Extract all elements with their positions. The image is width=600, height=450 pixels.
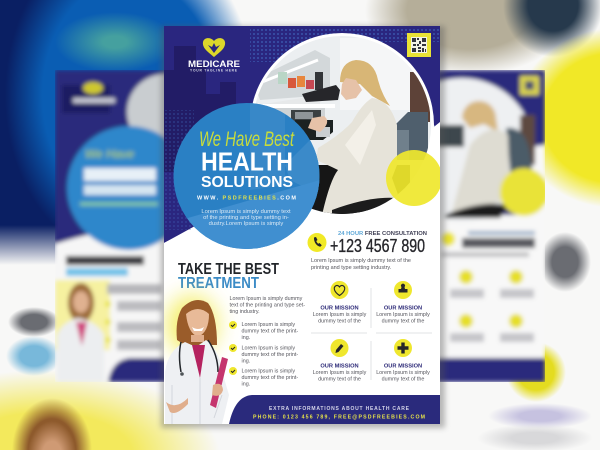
doctor yellow glow	[166, 295, 218, 355]
checklist	[229, 321, 298, 388]
mission 1: Lorem Ipsum is simply	[313, 312, 367, 318]
check item 1: ing.	[242, 335, 250, 341]
mission 1: OUR MISSION	[320, 306, 359, 312]
consultation text	[311, 258, 411, 271]
photo ring	[252, 33, 434, 130]
check item 2: dummy text of the print-	[242, 352, 298, 358]
mission 2: Lorem Ipsum is simply	[376, 312, 430, 318]
right blurred flyer	[440, 70, 545, 382]
lab photo	[256, 36, 431, 214]
treatment intro text: text of the printing and type set-	[230, 302, 305, 308]
tagline: YOUR TAGLINE HERE	[190, 68, 238, 72]
scientist	[308, 60, 400, 218]
phone icon	[308, 233, 326, 252]
treatment intro text: ting industry.	[230, 309, 260, 315]
check item 3: Lorem Ipsum is simply	[242, 368, 295, 374]
mission 4: OUR MISSION	[384, 364, 422, 370]
white lower area curve	[164, 122, 440, 243]
mission 1: dummy text of the	[318, 318, 361, 324]
doctor portrait	[165, 300, 229, 424]
mission 2: OUR MISSION	[384, 306, 422, 312]
yellow circle	[386, 150, 442, 206]
footer band	[229, 395, 440, 424]
mission 4: Lorem Ipsum is simply	[376, 370, 430, 376]
circle body text: dustry.Lorem Ipsum is simply	[209, 221, 283, 227]
check item 2: Lorem Ipsum is simply	[242, 346, 295, 352]
check item 3: ing.	[242, 382, 250, 388]
check item 1: dummy text of the print-	[242, 328, 298, 334]
mission 3	[313, 339, 367, 382]
check item 1	[229, 321, 298, 341]
treatment heading: TAKE THE BEST	[178, 261, 279, 278]
mission 1	[313, 281, 367, 324]
mission 4	[376, 339, 430, 382]
brand name: MEDICARE	[188, 59, 240, 70]
treatment intro text: Lorem Ipsum is simply dummy	[230, 296, 303, 302]
main flyer shadow	[161, 26, 445, 428]
mission 3: OUR MISSION	[320, 364, 359, 370]
website: WWW. PSDFREEBIES .COM	[197, 196, 296, 202]
circle body text	[201, 209, 291, 227]
check item 3	[229, 367, 298, 388]
script heading: We Have Best	[199, 128, 295, 151]
consultation label: 24 HOUR FREE CONSULTATION	[338, 231, 427, 237]
phone number: +123 4567 890	[330, 236, 425, 256]
QR code	[407, 33, 431, 57]
circle body text: Lorem Ipsum is simply dummy text	[201, 209, 291, 215]
main flyer	[164, 26, 442, 424]
logo icon	[203, 38, 225, 57]
left blurred flyer: We Have	[85, 147, 134, 161]
treatment heading: TREATMENT	[178, 275, 259, 292]
check item 2	[229, 344, 298, 364]
health heading: HEALTH	[201, 146, 293, 176]
mission 3: dummy text of the	[318, 376, 361, 382]
logo	[188, 38, 240, 72]
check item 3: dummy text of the print-	[242, 375, 298, 381]
treatment heading	[178, 263, 279, 288]
mission 2: dummy text of the	[382, 318, 424, 324]
mission 2	[376, 281, 430, 324]
treatment intro text	[230, 296, 305, 315]
check item 2: ing.	[242, 358, 250, 364]
blue circle	[174, 102, 320, 250]
consultation text: printing and type setting industry.	[311, 265, 392, 271]
check item 1: Lorem Ipsum is simply	[242, 322, 295, 328]
footer title: EXTRA INFORMATIONS ABOUT HEALTH CARE	[269, 406, 410, 412]
mission 4: dummy text of the	[382, 376, 424, 382]
footer contact: PHONE: 0123 456 789, FREE@PSDFREEBIES.COM	[253, 414, 425, 420]
navy header background	[164, 26, 440, 243]
solutions heading: SOLUTIONS	[201, 174, 293, 191]
consultation text: Lorem Ipsum is simply dummy text of the	[311, 258, 411, 264]
mission 3: Lorem Ipsum is simply	[313, 370, 367, 376]
left blurred flyer	[55, 70, 164, 382]
consultation phone block	[308, 231, 427, 271]
circle body text: of the printing and type setting in-	[203, 215, 289, 221]
